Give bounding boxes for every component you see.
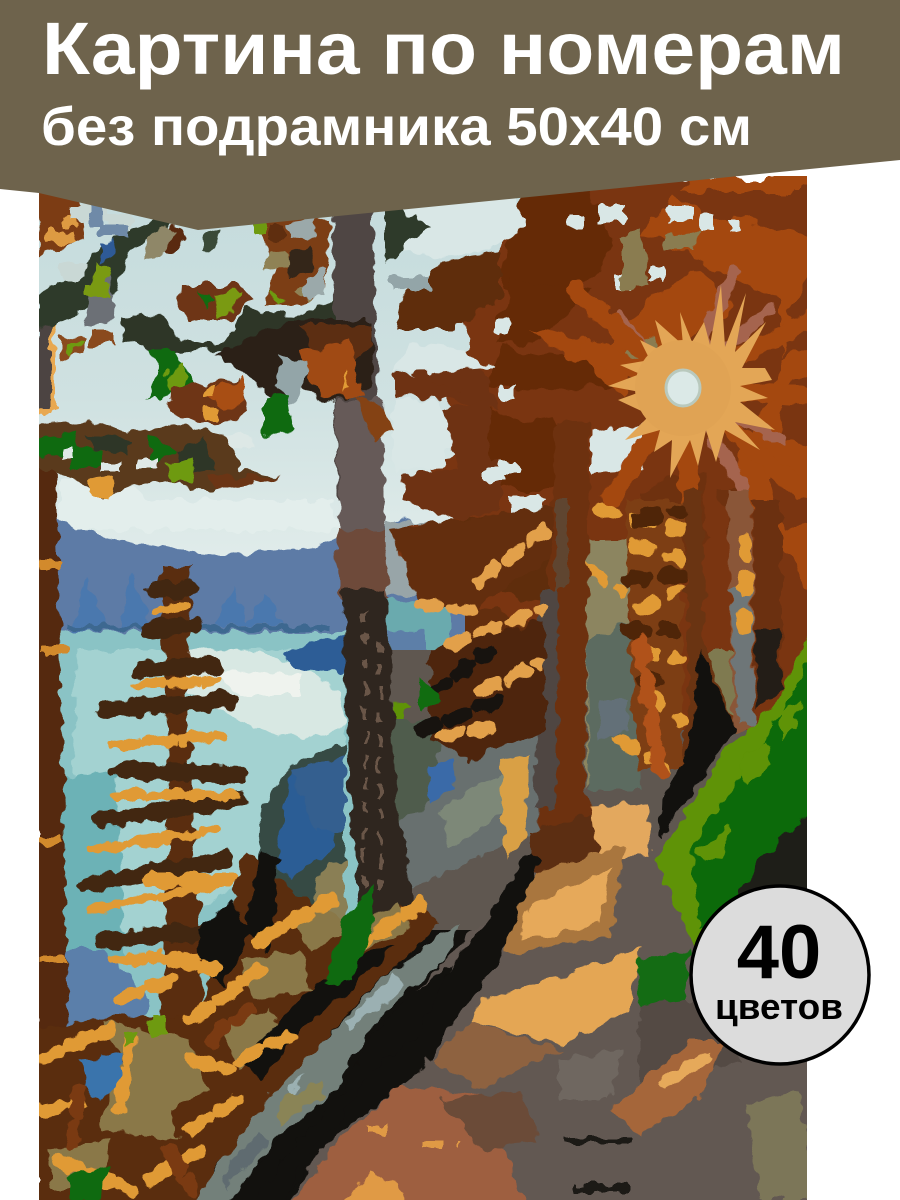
title: Картина по номерам xyxy=(42,7,845,90)
pale cloud xyxy=(58,478,334,508)
sun glow rays xyxy=(575,270,810,510)
blue cliff xyxy=(255,745,345,925)
upper centre cluster xyxy=(262,218,333,306)
main pine trunk xyxy=(333,205,418,935)
rust backdrop, right edge xyxy=(681,634,806,730)
lake xyxy=(55,600,450,1032)
painting: forest path at sunset xyxy=(36,176,830,1200)
central right tree trunk xyxy=(535,420,600,830)
badge: 40 colours: цветов xyxy=(715,986,843,1027)
fallen grey log xyxy=(190,923,460,1200)
lower black shadow under log xyxy=(250,965,450,1200)
lower slope, gravel xyxy=(290,930,742,1200)
bottom earth xyxy=(285,1085,812,1200)
left edge trunk xyxy=(39,324,70,1030)
rust backdrop, centre xyxy=(465,606,528,640)
dark shadow band xyxy=(318,853,542,1152)
sun star xyxy=(608,285,775,478)
small fir tree xyxy=(85,565,240,1030)
upper left foliage xyxy=(36,190,460,500)
sunlit footpath xyxy=(430,803,725,1135)
lower branch xyxy=(36,420,280,500)
sky gaps in foliage xyxy=(390,180,740,522)
dark underlay of slope xyxy=(242,930,475,1200)
right of trunk foliage xyxy=(384,210,431,264)
lake island xyxy=(284,636,346,672)
sunlit forest mass xyxy=(395,176,830,640)
background slope xyxy=(392,540,735,900)
sun core xyxy=(666,370,700,406)
sky xyxy=(39,198,520,557)
sun with rays xyxy=(575,270,810,510)
badge: 40 colours xyxy=(691,886,869,1064)
green hillside xyxy=(635,625,812,1005)
tan clusters in foliage xyxy=(620,230,700,372)
ground behind forest xyxy=(388,650,747,930)
header banner xyxy=(0,0,900,230)
distant mountains xyxy=(55,518,480,640)
top left cluster xyxy=(36,190,85,255)
sun inner shade xyxy=(635,340,692,419)
main branch xyxy=(122,300,335,355)
orange foliage columns xyxy=(590,510,745,770)
distant right trunks xyxy=(625,488,785,772)
bottom left autumn foliage xyxy=(36,850,440,1200)
foliage fingers towards the trunk xyxy=(395,250,500,520)
green and orange cluster xyxy=(145,350,195,398)
foliage left of central trunk xyxy=(392,505,555,860)
badge: 40 colours: 40 xyxy=(737,910,821,995)
subtitle: без подрамника 50х40 см xyxy=(41,97,752,157)
